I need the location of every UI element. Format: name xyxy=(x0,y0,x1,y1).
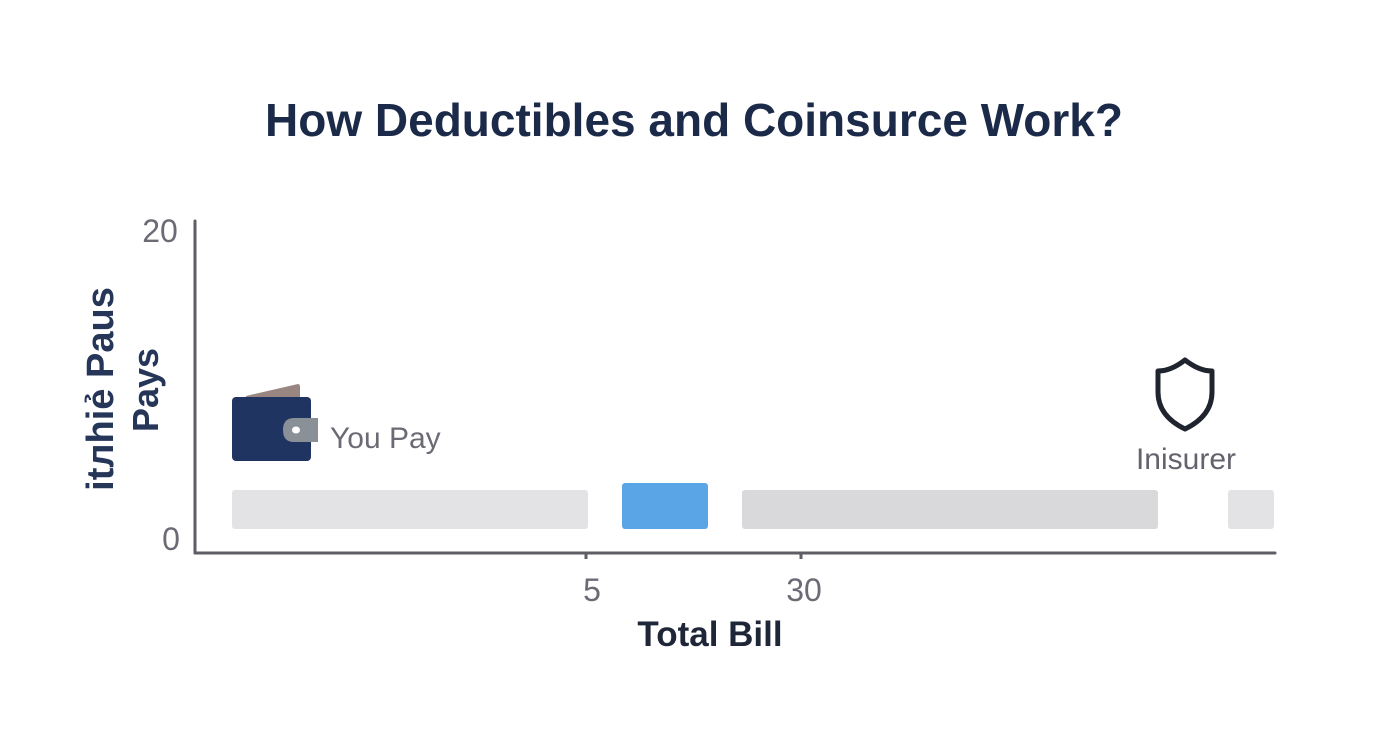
title: How Deductibles and Coinsurce Work? xyxy=(265,94,1123,146)
x label 30: 30 xyxy=(786,572,822,608)
tick 30 xyxy=(800,553,802,559)
x axis xyxy=(195,552,1275,554)
bar: coinsurance xyxy=(742,490,1158,529)
bar: deductible xyxy=(232,490,588,529)
tick 5 xyxy=(584,553,588,559)
y label 20: 20 xyxy=(142,213,178,249)
bar: highlight xyxy=(622,483,708,529)
y label 0: 0 xyxy=(162,521,180,557)
y axis title: itлhiẻ Paus xyxy=(80,287,122,491)
x label 5: 5 xyxy=(583,572,601,608)
label: insurer: Inisurer xyxy=(1136,443,1236,476)
bar: insurer xyxy=(1228,490,1274,529)
chart xyxy=(80,213,1275,654)
y axis title line 2: Pays xyxy=(125,348,166,432)
icon: shield xyxy=(1158,360,1212,429)
label: you pay: You Pay xyxy=(330,422,441,455)
x axis title: Total Bill xyxy=(637,615,783,654)
y axis xyxy=(194,221,196,553)
icon: wallet xyxy=(232,384,318,461)
